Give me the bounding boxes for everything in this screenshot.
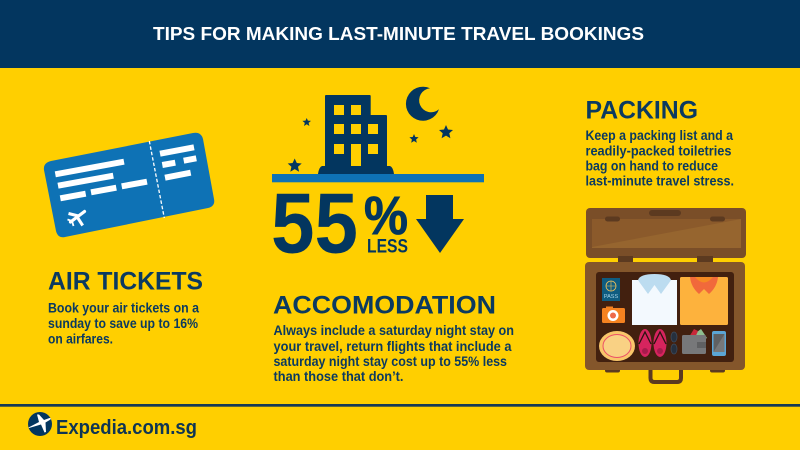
icon: flip flops xyxy=(638,329,666,357)
text block: air tickets xyxy=(48,300,199,346)
ground bar xyxy=(272,174,484,182)
text block: packing: bag on hand to reduce xyxy=(586,159,718,174)
heading: air tickets: AIR TICKETS xyxy=(48,267,203,295)
text block: air tickets: on airfares. xyxy=(48,331,113,346)
statistic: 55% less: LESS xyxy=(367,237,408,258)
icon: wallet xyxy=(682,329,707,354)
text block: packing: readily-packed toiletries xyxy=(586,144,732,159)
text block: accomodation: Always include a saturday night stay on xyxy=(274,323,514,338)
icon: hat xyxy=(599,331,635,361)
text block: packing xyxy=(586,128,734,189)
text block: accomodation: your travel, return flights that include a xyxy=(274,339,512,354)
icon: white shirt xyxy=(632,274,677,325)
suitcase lid xyxy=(586,208,746,258)
text block: air tickets: Book your air tickets on a xyxy=(48,300,199,315)
stars xyxy=(288,118,453,172)
heading: accomodation: ACCOMODATION xyxy=(273,291,496,319)
suitcase interior xyxy=(596,272,734,362)
text block: packing: Keep a packing list and a xyxy=(586,128,733,143)
hinges xyxy=(618,256,713,263)
text block: accomodation xyxy=(274,323,514,384)
text block: accomodation: saturday night stay cost up to 55% less xyxy=(274,354,507,369)
icon: globe with plane xyxy=(28,412,52,436)
icon: passport: PASS xyxy=(604,294,618,300)
text block: air tickets: sunday to save up to 16% xyxy=(48,316,198,331)
icon: phone xyxy=(712,331,726,356)
suitcase body xyxy=(585,262,745,370)
icon: orange shirt xyxy=(680,277,728,325)
statistic: 55% less: % xyxy=(364,186,408,246)
icon: sunglasses xyxy=(671,332,677,354)
wordmark: Expedia.com.sg xyxy=(56,417,197,439)
text block: accomodation: than those that don’t. xyxy=(274,369,404,384)
footer logo: Expedia.com.sg xyxy=(28,412,197,439)
arrow: down xyxy=(416,195,464,253)
icon: moon xyxy=(406,87,439,121)
icon: building xyxy=(318,95,394,174)
icon: hotel at night xyxy=(272,87,484,182)
statistic: 55% less: 55 xyxy=(271,177,358,272)
statistic: 55% less xyxy=(271,177,408,272)
icon: air ticket xyxy=(44,133,214,237)
header banner xyxy=(0,0,800,68)
footer rule xyxy=(0,404,800,407)
title: TIPS FOR MAKING LAST-MINUTE TRAVEL BOOKINGS xyxy=(153,23,644,44)
icon: camera xyxy=(602,306,625,323)
text block: packing: last-minute travel stress. xyxy=(586,174,734,189)
icon: open suitcase xyxy=(585,208,746,382)
heading: packing: PACKING xyxy=(586,96,698,124)
icon: passport xyxy=(602,278,620,301)
suitcase feet and handle xyxy=(605,368,725,382)
